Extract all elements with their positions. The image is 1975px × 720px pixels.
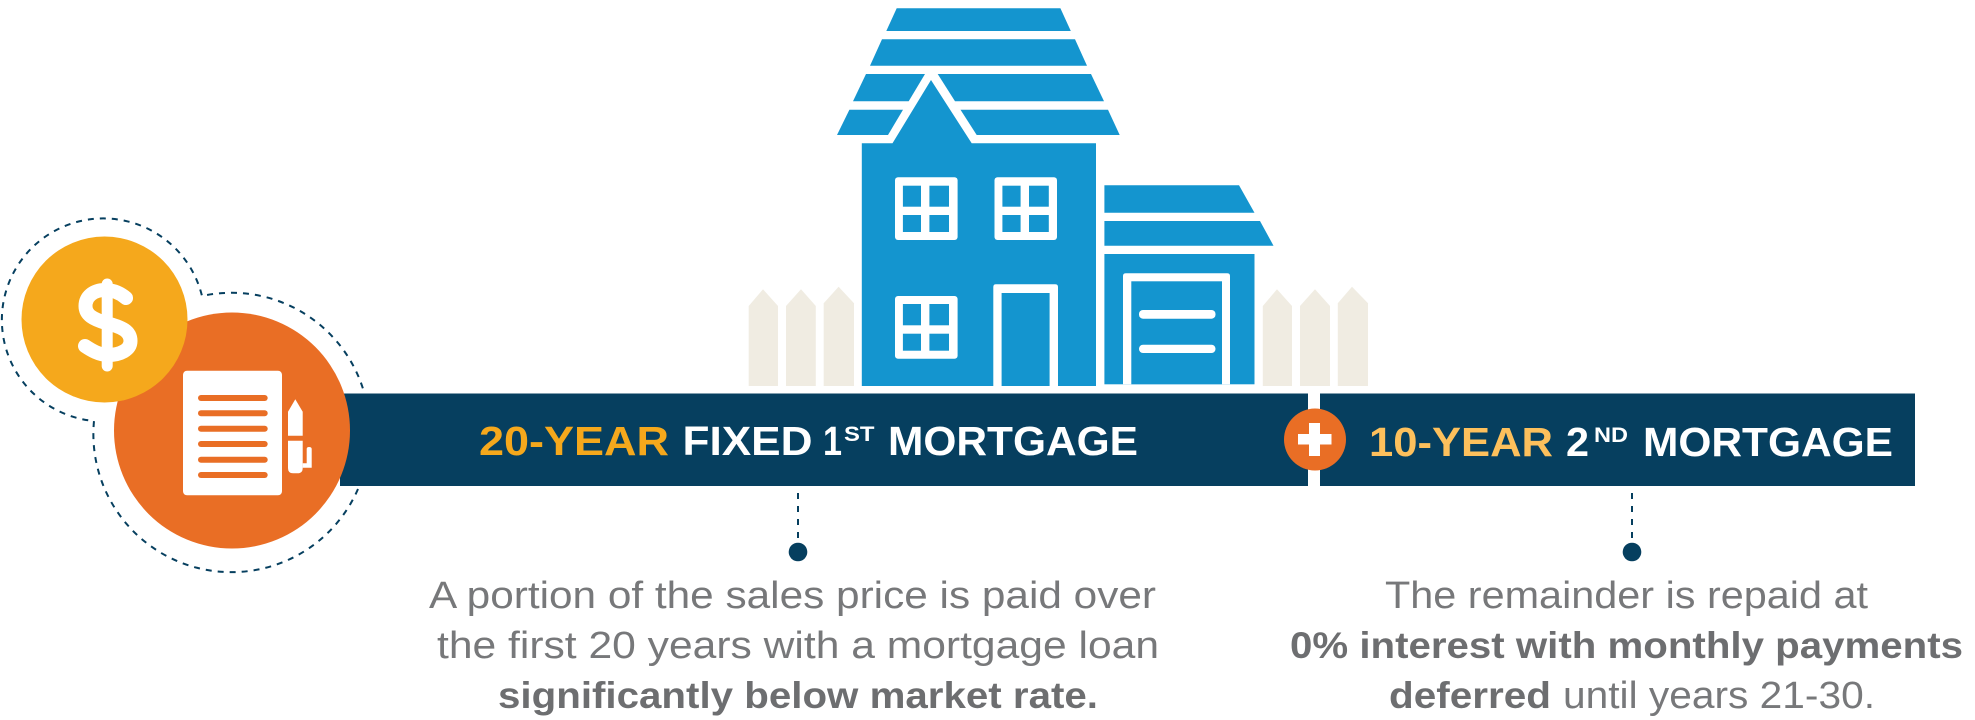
heading: 20-year fixed 1st mortgage: FIXED [682,418,812,464]
garage [1104,254,1254,384]
heading: 10-year 2nd mortgage: 2 [1566,419,1589,465]
text: second mortgage description: until years 21-30. [1563,675,1875,717]
heading: 10-year 2nd mortgage: ND [1594,424,1628,447]
heading: 10-year 2nd mortgage: 10-YEAR [1369,419,1553,465]
text: first mortgage description [429,575,1159,716]
connector: first mortgage [789,493,807,561]
heading: 20-year fixed 1st mortgage: ST [844,423,875,446]
text: second mortgage description [1290,575,1963,717]
text: second mortgage description: deferred [1389,674,1551,716]
heading: 20-year fixed 1st mortgage: MORTGAGE [888,418,1138,464]
heading: 20-year fixed 1st mortgage: 20-YEAR [479,418,669,464]
text: second mortgage description: 0% interest with monthly payments [1290,624,1963,666]
house body [862,80,1096,386]
fence left [749,287,854,386]
mortgage bar [340,394,1915,486]
icon: document and pen [114,312,350,548]
icon: house [749,8,1368,386]
roof [837,8,1120,135]
text: first mortgage description: A portion of the sales price is paid over [429,575,1156,617]
plus sign [1284,394,1346,486]
dashed outline around icons [2,218,364,572]
icon: dollar coin [22,236,188,402]
garage roof [1104,185,1274,246]
fence right [1263,287,1368,386]
door [993,284,1058,386]
heading: 10-year 2nd mortgage: MORTGAGE [1643,419,1893,465]
heading: 10-year 2nd mortgage [1369,419,1893,465]
window upper right [994,177,1057,240]
text: second mortgage description: The remainder is repaid at [1385,575,1868,617]
window upper left [895,177,958,240]
window lower [895,296,958,359]
text: first mortgage description: the first 20 years with a mortgage loan [437,625,1159,667]
text: first mortgage description: significantly below market rate. [498,674,1098,716]
connector: second mortgage [1623,493,1641,561]
heading: 20-year fixed 1st mortgage [479,418,1138,464]
heading: 20-year fixed 1st mortgage: 1 [823,418,842,464]
